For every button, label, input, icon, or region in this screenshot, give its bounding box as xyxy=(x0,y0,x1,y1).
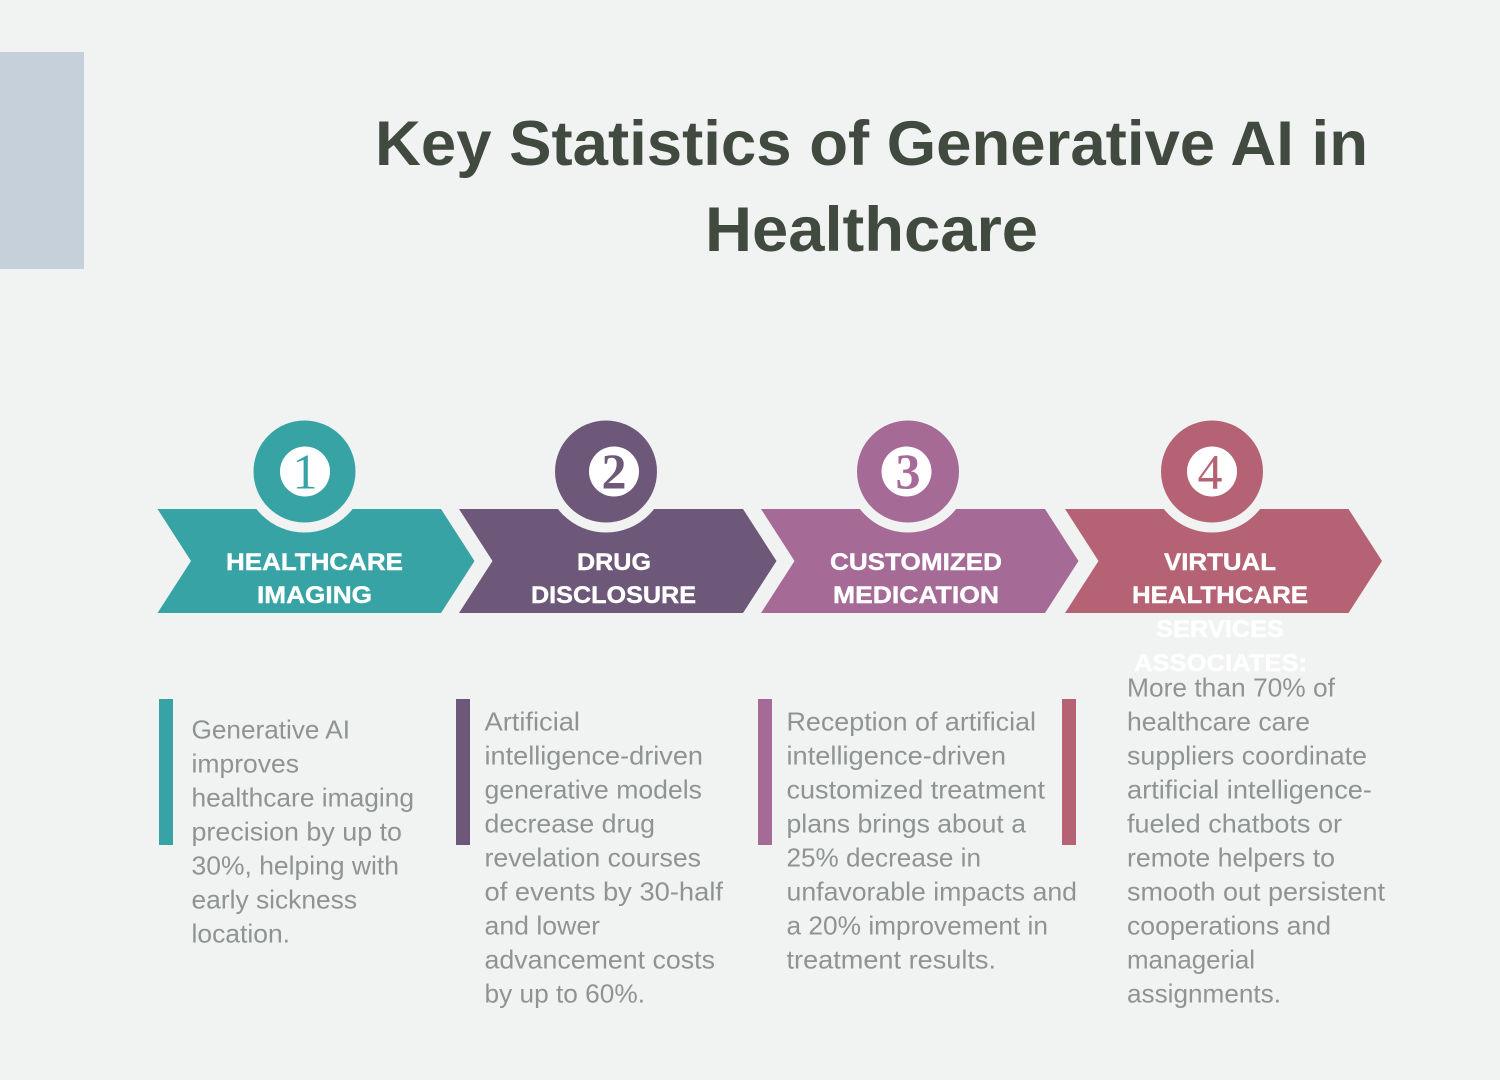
description 3: unfavorable impacts and xyxy=(786,876,1077,906)
description 3: plans brings about a xyxy=(786,808,1027,838)
title: Healthcare xyxy=(705,195,1038,265)
step 1: healthcare imaging xyxy=(158,410,474,613)
description 4 xyxy=(1127,672,1386,1008)
heading 1: HEALTHCARE xyxy=(226,549,403,576)
step 4: virtual healthcare xyxy=(1065,410,1382,677)
heading 2: DISCLOSURE xyxy=(531,582,696,609)
number badge 4 xyxy=(1161,420,1263,522)
chevron 4 xyxy=(1065,509,1382,613)
description 3: Reception of artificial xyxy=(786,706,1036,736)
heading 2 xyxy=(531,549,696,609)
description 1: healthcare imaging xyxy=(192,782,414,812)
description 1: location. xyxy=(192,918,290,948)
description 2: generative models xyxy=(484,774,702,804)
chevron 2 xyxy=(459,509,776,613)
description 2: decrease drug xyxy=(484,808,655,838)
description 1: 30%, helping with xyxy=(192,850,399,880)
title: Key Statistics of Generative AI in xyxy=(375,109,1368,179)
heading 4: SERVICES xyxy=(1156,616,1284,643)
accent bar 4 xyxy=(1062,699,1076,845)
number badge 3: 3 xyxy=(896,443,920,499)
description 4: healthcare care xyxy=(1127,706,1310,736)
title xyxy=(375,109,1368,265)
number badge 2 xyxy=(555,420,657,522)
heading 4 xyxy=(1132,549,1308,677)
description 2: by up to 60%. xyxy=(484,978,645,1008)
heading 2: DRUG xyxy=(577,549,651,576)
number badge 3 xyxy=(857,420,959,522)
description 3: 25% decrease in xyxy=(786,842,981,872)
description 1: early sickness xyxy=(192,884,357,914)
decorative corner block xyxy=(0,52,84,269)
heading 1: IMAGING xyxy=(257,582,372,609)
circle cut-out 2 xyxy=(545,410,667,532)
circle cut-out 4 xyxy=(1151,410,1273,532)
circle cut-out 1 xyxy=(244,410,366,532)
heading 1 xyxy=(226,549,403,609)
description 4: managerial xyxy=(1127,944,1255,974)
description 4: cooperations and xyxy=(1127,910,1331,940)
heading 3: CUSTOMIZED xyxy=(830,549,1002,576)
description 1: improves xyxy=(192,748,299,778)
accent bar 2 xyxy=(456,699,470,845)
description 4: More than 70% of xyxy=(1127,672,1336,702)
description 1 xyxy=(192,714,414,948)
description 3: intelligence-driven xyxy=(786,740,1006,770)
heading 4: VIRTUAL xyxy=(1164,549,1276,576)
description 4: smooth out persistent xyxy=(1127,876,1386,906)
heading 3: MEDICATION xyxy=(833,582,999,609)
description 2: and lower xyxy=(484,910,600,940)
description 2: revelation courses xyxy=(484,842,701,872)
description 3: a 20% improvement in xyxy=(786,910,1048,940)
description 4: artificial intelligence- xyxy=(1127,774,1372,804)
circle cut-out 3 xyxy=(847,410,969,532)
step 3: customized medication xyxy=(761,410,1078,613)
description 1: precision by up to xyxy=(192,816,402,846)
number badge 2: 2 xyxy=(602,443,626,499)
description 2: intelligence-driven xyxy=(484,740,703,770)
accent bar 1 xyxy=(159,699,173,845)
number badge 1 xyxy=(254,420,356,522)
description 2 xyxy=(484,706,724,1008)
description 4: suppliers coordinate xyxy=(1127,740,1367,770)
description 4: fueled chatbots or xyxy=(1127,808,1342,838)
heading 3 xyxy=(830,549,1002,609)
heading 4: HEALTHCARE xyxy=(1132,582,1308,609)
heading 4: ASSOCIATES: xyxy=(1134,650,1307,677)
description 1: Generative AI xyxy=(192,714,350,744)
accent bar 3 xyxy=(758,699,772,845)
description 3: treatment results. xyxy=(786,944,996,974)
number badge 4: 4 xyxy=(1198,444,1222,500)
description 2: advancement costs xyxy=(484,944,715,974)
chevron 1 xyxy=(158,509,474,613)
description 3 xyxy=(786,706,1077,974)
description 4: assignments. xyxy=(1127,978,1281,1008)
step 2: drug disclosure xyxy=(459,410,776,613)
number badge 1: 1 xyxy=(292,444,318,500)
description 3: customized treatment xyxy=(786,774,1046,804)
description 4: remote helpers to xyxy=(1127,842,1335,872)
description 2: of events by 30-half xyxy=(484,876,724,906)
description 2: Artificial xyxy=(484,706,580,736)
chevron 3 xyxy=(761,509,1078,613)
